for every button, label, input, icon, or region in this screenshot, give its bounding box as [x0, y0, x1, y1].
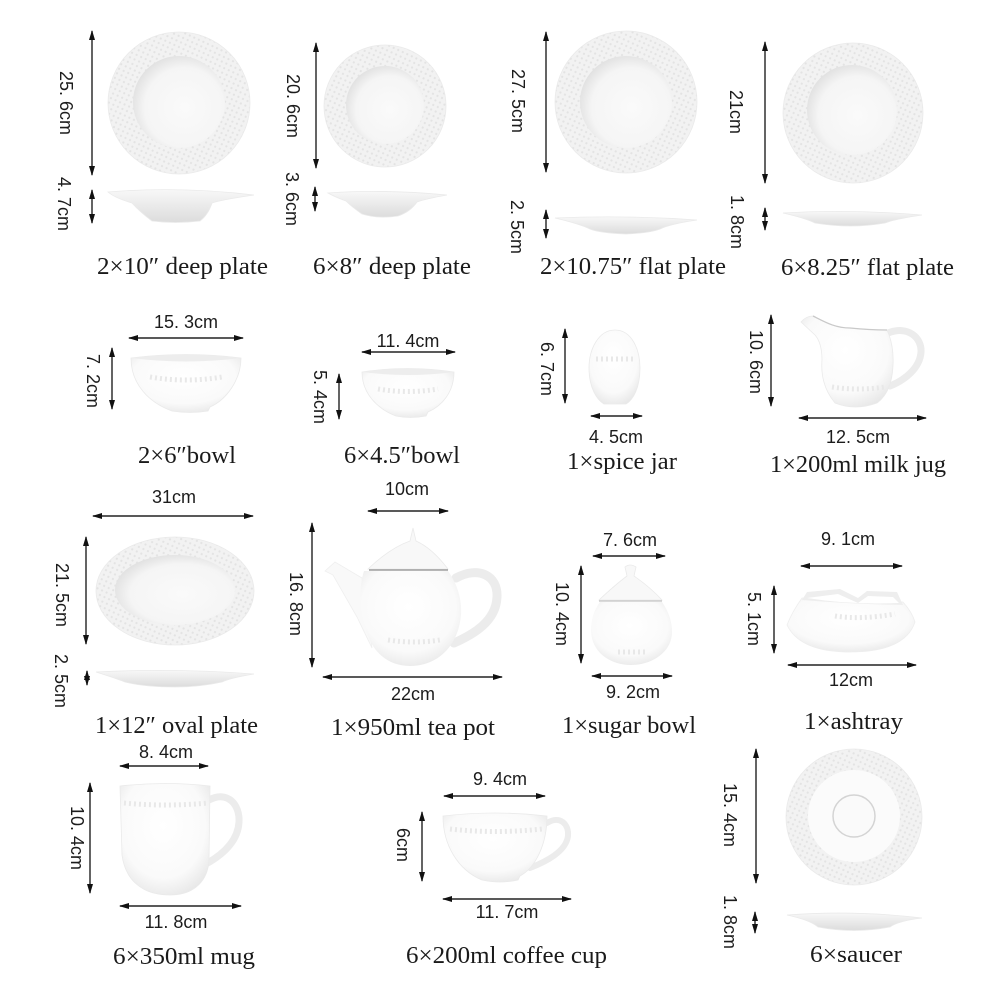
label: 6×4.5″bowl: [344, 443, 460, 469]
label: 1×sugar bowl: [562, 713, 696, 739]
label: 6×200ml coffee cup: [406, 943, 607, 969]
label: 6×8″ deep plate: [313, 254, 471, 280]
arrow: depth: [314, 187, 316, 211]
label: 1×950ml tea pot: [331, 715, 495, 741]
arrow: width: [93, 515, 253, 517]
dimension: 31cm: 31cm: [152, 487, 196, 507]
arrow: top width: [801, 565, 902, 567]
icon: mug: [120, 784, 239, 895]
item: saucer: [720, 749, 922, 968]
dimension: 4.7cm: 4. 7cm: [54, 177, 74, 231]
dimension: 10.4cm: 10. 4cm: [67, 806, 87, 870]
arrow: depth: [545, 210, 547, 238]
dimension: 10cm: 10cm: [385, 479, 429, 499]
icon: sugar bowl: [591, 565, 672, 665]
label: 1×12″ oval plate: [95, 713, 258, 739]
dimension: 11.7cm: 11. 7cm: [476, 902, 538, 922]
dimension: 7.6cm: 7. 6cm: [603, 530, 657, 550]
icon: deep plate side view: [108, 190, 254, 222]
item: mug: [67, 742, 255, 970]
arrow: lid width: [368, 510, 448, 512]
dimension: 15.4cm: 15. 4cm: [720, 783, 740, 847]
icon: saucer top view: [786, 749, 922, 885]
dimension: 7.2cm: 7. 2cm: [83, 354, 103, 408]
arrow: depth: [86, 671, 88, 685]
item: 2x10.75 flat plate: [507, 31, 726, 280]
dimension: 5.4cm: 5. 4cm: [310, 370, 330, 424]
arrow: height: [764, 42, 766, 183]
arrow: height: [89, 783, 91, 893]
label: 1×ashtray: [804, 709, 903, 735]
label: 2×6″bowl: [138, 443, 236, 469]
icon: ashtray: [787, 589, 915, 652]
icon: tea pot: [325, 528, 497, 666]
dimension: 12cm: 12cm: [829, 670, 873, 690]
arrow: depth: [91, 190, 93, 223]
icon: flat plate side view: [783, 211, 922, 226]
dimension: 11.4cm: 11. 4cm: [377, 331, 439, 351]
dimension: 1.8cm: 1. 8cm: [727, 195, 747, 249]
icon: saucer side view: [787, 913, 922, 930]
dimension: 1.8cm: 1. 8cm: [720, 895, 740, 949]
icon: spice jar: [589, 330, 640, 404]
dimension: 21.5cm: 21. 5cm: [52, 563, 72, 627]
arrow: height: [315, 43, 317, 168]
icon: flat plate side view: [555, 217, 697, 234]
arrow: width: [799, 417, 926, 419]
dimension: 15.3cm: 15. 3cm: [154, 312, 218, 332]
dimension: 5.1cm: 5. 1cm: [744, 592, 764, 646]
arrow: height: [755, 749, 757, 883]
label: 2×10.75″ flat plate: [540, 254, 726, 280]
arrow: height: [564, 329, 566, 403]
arrow: base width: [788, 664, 916, 666]
item: 6x8 deep plate: [282, 43, 471, 280]
arrow: width: [443, 898, 571, 900]
item: sugar bowl: [552, 530, 696, 739]
dimension: 4.5cm: 4. 5cm: [589, 427, 643, 447]
dimension: 22cm: 22cm: [391, 684, 435, 704]
arrow: height: [773, 586, 775, 653]
dimension: 2.5cm: 2. 5cm: [507, 200, 527, 254]
arrow: width: [362, 351, 455, 353]
dimension: 11.8cm: 11. 8cm: [145, 912, 207, 932]
icon: bowl: [131, 354, 241, 412]
dimension: 3.6cm: 3. 6cm: [282, 172, 302, 226]
arrow: width: [129, 337, 243, 339]
label: 6×saucer: [810, 942, 902, 968]
dimension: 2.5cm: 2. 5cm: [51, 654, 71, 708]
arrow: depth: [754, 912, 756, 933]
item: spice jar: [537, 329, 677, 475]
icon: deep plate top view: [324, 45, 446, 167]
arrow: top width: [444, 795, 545, 797]
icon: flat plate top view: [555, 31, 697, 173]
arrow: height: [545, 32, 547, 172]
arrow: width: [120, 905, 241, 907]
dimension: 12.5cm: 12. 5cm: [826, 427, 890, 447]
label: 1×200ml milk jug: [770, 452, 946, 478]
arrow: depth: [764, 208, 766, 230]
dimension: 9.2cm: 9. 2cm: [606, 682, 660, 702]
dimension: 25.6cm: 25. 6cm: [56, 71, 76, 135]
dimension: 10.4cm: 10. 4cm: [552, 582, 572, 646]
arrow: height: [770, 315, 772, 406]
arrow: height: [421, 812, 423, 881]
dimension: 6.7cm: 6. 7cm: [537, 342, 557, 396]
label: 1×spice jar: [567, 449, 677, 475]
arrow: top width: [120, 765, 208, 767]
icon: bowl: [362, 368, 454, 418]
item: ashtray: [744, 529, 916, 735]
item: oval plate: [51, 487, 258, 739]
arrow: width: [592, 675, 672, 677]
dimension: 10.6cm: 10. 6cm: [746, 330, 766, 394]
item: milk jug: [746, 315, 946, 478]
dimension: 21cm: 21cm: [726, 90, 746, 134]
arrow: width: [591, 415, 642, 417]
icon: oval plate side view: [96, 670, 254, 687]
icon: deep plate top view: [108, 32, 250, 174]
dimension: 9.4cm: 9. 4cm: [473, 769, 527, 789]
item: coffee cup: [393, 769, 607, 969]
dimension: 6cm: 6cm: [393, 828, 413, 862]
arrow: height: [580, 566, 582, 663]
dimension: 27.5cm: 27. 5cm: [508, 69, 528, 133]
arrow: height: [311, 523, 313, 667]
dimension: 9.1cm: 9. 1cm: [821, 529, 875, 549]
dimension: 8.4cm: 8. 4cm: [139, 742, 193, 762]
item: 2x6 bowl: [83, 312, 243, 469]
arrow: lid width: [593, 555, 665, 557]
label: 6×8.25″ flat plate: [781, 255, 954, 281]
icon: flat plate top view: [783, 43, 923, 183]
icon: coffee cup: [443, 813, 568, 882]
icon: milk jug: [801, 316, 921, 407]
arrow: height: [338, 374, 340, 419]
item: tea pot: [286, 479, 502, 741]
item: 2x10 deep plate: [54, 31, 268, 280]
item: 6x4.5 bowl: [310, 331, 460, 469]
arrow: height: [85, 537, 87, 644]
item: 6x8.25 flat plate: [726, 42, 954, 281]
icon: deep plate side view: [328, 191, 447, 217]
arrow: height: [111, 348, 113, 409]
label: 6×350ml mug: [113, 944, 255, 970]
arrow: width: [323, 676, 502, 678]
icon: oval plate top view: [96, 537, 254, 645]
dimension: 16.8cm: 16. 8cm: [286, 572, 306, 636]
dimension: 20.6cm: 20. 6cm: [283, 74, 303, 138]
label: 2×10″ deep plate: [97, 254, 268, 280]
arrow: height: [91, 31, 93, 175]
